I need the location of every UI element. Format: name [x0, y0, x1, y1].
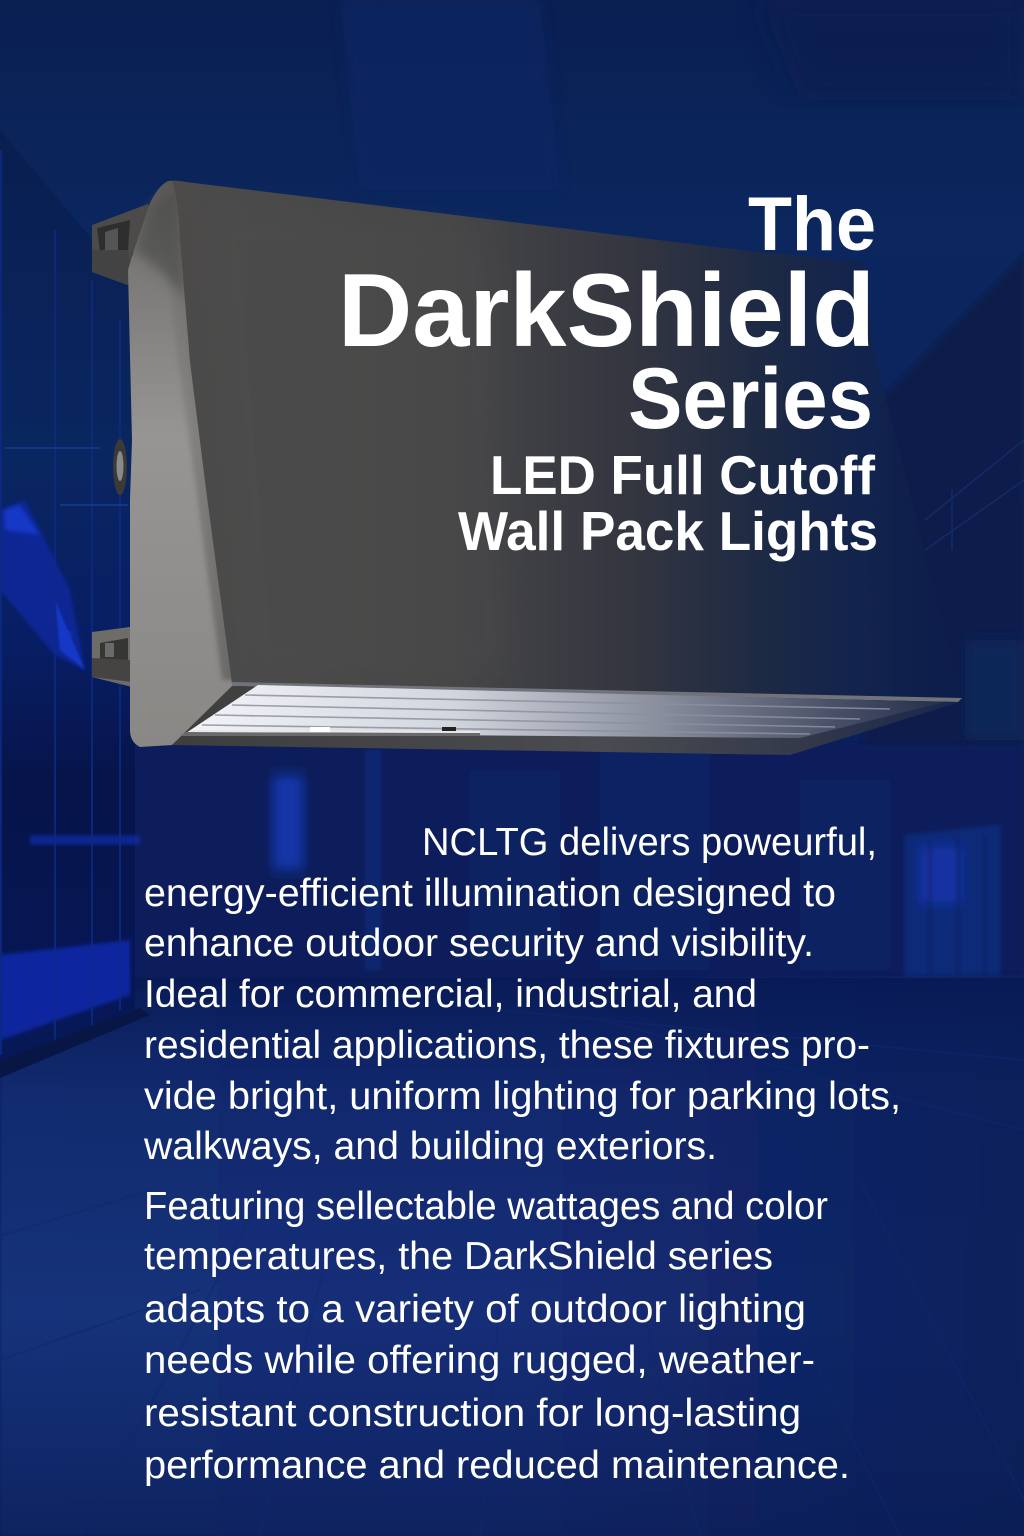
- subtitle line 1: LED Full Cutoff: [490, 444, 876, 506]
- text block: intro paragraph: enhance outdoor security and visibility.: [144, 922, 814, 965]
- conduit knob: [113, 439, 127, 495]
- background: left glass wall: [0, 130, 150, 1078]
- background: right building: [860, 255, 1024, 1000]
- fixture front sheen: [200, 200, 520, 680]
- text block: intro paragraph: energy-efficient illumination designed to: [144, 872, 836, 915]
- background: floor: [0, 975, 1024, 1536]
- title line: Series: Series: [628, 351, 873, 447]
- text block: features paragraph: adapts to a variety of outdoor lighting: [144, 1288, 806, 1331]
- lower lens tray: [172, 686, 960, 755]
- text block: features paragraph: needs while offering rugged, weather-: [144, 1339, 815, 1382]
- text block: features paragraph: resistant construction for long-lasting: [144, 1392, 801, 1435]
- title line: The: The: [748, 182, 876, 267]
- illuminated lens: [180, 685, 945, 738]
- text block: features paragraph: performance and reduced maintenance.: [144, 1444, 850, 1487]
- text block: intro paragraph: Ideal for commercial, industrial, and: [144, 973, 757, 1016]
- text block: intro paragraph: [143, 821, 901, 1168]
- upper mounting bracket: [92, 204, 156, 287]
- text block: features paragraph: temperatures, the DarkShield series: [144, 1235, 773, 1278]
- title: [338, 182, 878, 562]
- soft edge between side and front: [158, 190, 236, 680]
- fixture front face: [172, 181, 962, 699]
- lower mounting bracket: [92, 624, 155, 687]
- title line: DarkShield: DarkShield: [338, 253, 875, 369]
- product: LED wall pack fixture: [92, 181, 962, 755]
- text block: intro paragraph: NCLTG delivers poweurful,: [422, 821, 877, 864]
- lower trim edge: [232, 682, 962, 702]
- text block: intro paragraph: walkways, and building exteriors.: [143, 1125, 717, 1168]
- text block: intro paragraph: vide bright, uniform lighting for parking lots,: [144, 1075, 901, 1118]
- text block: features paragraph: [144, 1185, 850, 1487]
- text block: intro paragraph: residential applications, these fixtures pro-: [144, 1024, 870, 1067]
- subtitle line 2: Wall Pack Lights: [458, 500, 878, 562]
- fixture side face: [128, 181, 236, 747]
- text block: features paragraph: Featuring sellectable wattages and color: [144, 1185, 828, 1228]
- background: centre corridor columns: [130, 745, 1024, 995]
